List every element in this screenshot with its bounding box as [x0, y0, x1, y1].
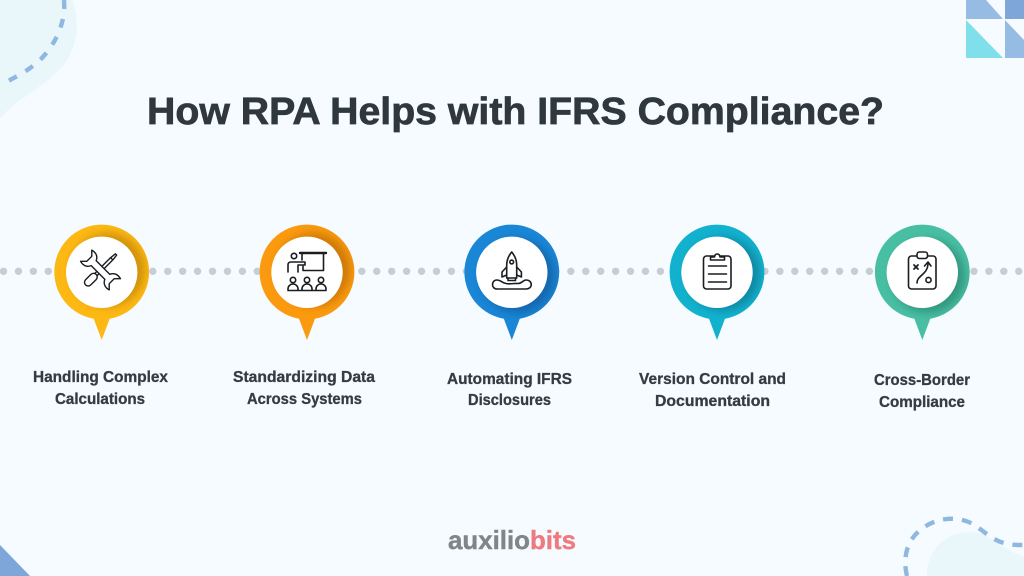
label: Automating IFRS [447, 371, 572, 388]
pin: teal [875, 225, 970, 340]
label: Compliance [879, 394, 965, 411]
icon: clipboard [704, 254, 731, 289]
decoration: top-left blob with dashed curve [0, 0, 77, 118]
step 2: standardizing data [233, 225, 375, 408]
label: Standardizing Data [233, 369, 375, 386]
step 1: handling complex calculations [33, 225, 168, 408]
decoration: bottom-right blob with dashed curve [905, 519, 1024, 576]
pin: cyan [670, 225, 764, 340]
label [33, 369, 168, 408]
icon: strategy clipboard [908, 252, 936, 289]
step 4: version control [639, 225, 786, 410]
pin: orange [260, 225, 354, 340]
label [639, 371, 786, 410]
logo: auxiliobits: auxiliobits [448, 525, 576, 555]
decoration: bottom-left triangle [0, 545, 30, 576]
dotted timeline [4, 268, 1024, 275]
label: Documentation [655, 393, 770, 410]
label: Across Systems [247, 391, 362, 408]
label: Cross-Border [874, 372, 970, 389]
decoration: top-right triangle grid [966, 0, 1024, 58]
pin: blue [464, 225, 559, 340]
pin: yellow [54, 225, 149, 340]
step 3: automating IFRS disclosures [447, 225, 572, 409]
label [447, 371, 572, 409]
label [233, 369, 375, 408]
label: Version Control and [639, 371, 786, 388]
label: Handling Complex [33, 369, 168, 386]
icon: wrench and screwdriver [80, 250, 121, 290]
icon: rocket launch [492, 252, 531, 289]
label [874, 372, 970, 411]
title: How RPA Helps with IFRS Compliance? [147, 91, 884, 133]
label: Disclosures [468, 392, 551, 409]
icon: presenter and audience [288, 253, 326, 290]
label: Calculations [55, 391, 145, 408]
step 5: cross-border compliance [874, 225, 970, 411]
